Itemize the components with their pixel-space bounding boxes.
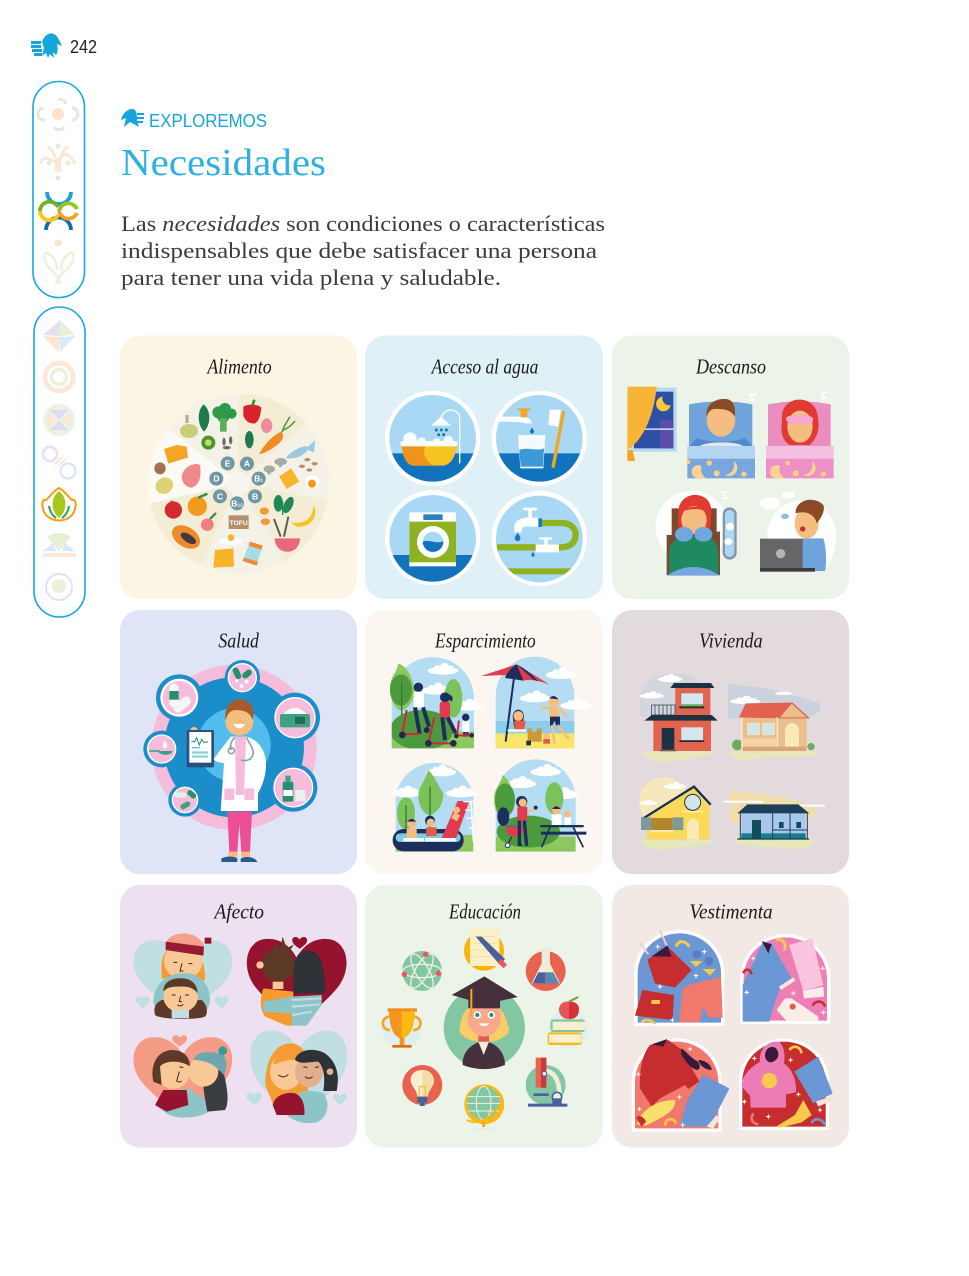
icon: capsules	[156, 674, 203, 721]
icon: flask	[526, 948, 566, 991]
icon: pills	[225, 660, 260, 695]
sticker: blue arch	[635, 930, 723, 1024]
icon: spoon	[143, 731, 180, 767]
icon: bulb	[402, 1065, 442, 1106]
sticker: pink arch	[742, 936, 829, 1022]
heading: Alimento	[206, 357, 272, 379]
panel: Vestimenta	[612, 885, 849, 1148]
heading: Afecto	[212, 901, 264, 923]
sidebar capsule: top	[33, 82, 84, 298]
icon: cream jar	[270, 693, 320, 743]
food icons	[153, 400, 319, 568]
icon: pipe and faucet	[492, 491, 587, 586]
icon: paper and pencil	[464, 928, 507, 971]
icon: interlaced arcs	[40, 192, 77, 230]
food wheel: D	[213, 474, 219, 484]
section header	[121, 109, 267, 131]
food wheel: C	[217, 491, 224, 501]
intro text: indispensables que debe satisfacer una persona	[121, 238, 597, 263]
heading: Descanso	[695, 357, 766, 379]
couple: kissing	[133, 1035, 232, 1118]
food wheel: B	[252, 491, 258, 501]
food wheel	[148, 394, 329, 574]
kicker: EXPLOREMOS	[149, 111, 267, 131]
icon: swirl	[38, 100, 78, 130]
food wheel: E	[225, 458, 231, 468]
panel: Salud	[120, 610, 357, 874]
panel: Vivienda	[612, 610, 849, 874]
page number: 242	[70, 37, 97, 57]
panel: Esparcimiento	[365, 610, 603, 874]
couple: seen from behind	[247, 937, 347, 1026]
icon: diamond	[43, 320, 75, 353]
food wheel: B1	[254, 474, 263, 484]
house: yellow with round window	[639, 777, 713, 850]
icon: ring	[45, 363, 73, 391]
icon: bottle	[269, 764, 317, 812]
icon: small capsules	[168, 783, 202, 817]
scene: pool	[391, 763, 477, 853]
heading: Vestimenta	[689, 902, 773, 924]
sticker: dark red arch	[741, 1040, 837, 1128]
icon: microscope	[526, 1058, 567, 1107]
panel: Acceso al agua	[365, 336, 603, 599]
icon: fan	[43, 533, 76, 557]
icon: books and apple	[548, 997, 587, 1048]
food icons: TOFU	[230, 520, 248, 527]
sidebar capsule: bottom	[34, 307, 85, 617]
icon: man sleeping	[686, 395, 757, 478]
page number header	[31, 33, 97, 58]
panel: Educación	[365, 885, 603, 1148]
title: Necesidades	[121, 142, 326, 184]
heading: Esparcimiento	[434, 630, 536, 652]
icon: leaves	[44, 240, 73, 284]
icon: trophy	[382, 1008, 422, 1048]
graduate portrait	[444, 976, 525, 1069]
icon: bird glyph	[31, 33, 62, 58]
heading: Vivienda	[699, 630, 763, 652]
intro text: Las necesidades son condiciones o características	[121, 211, 605, 236]
panel: Alimento	[120, 336, 357, 599]
scene: barbecue	[493, 759, 586, 853]
heading: Salud	[218, 630, 260, 652]
food wheel: A	[244, 459, 251, 469]
house: peach cottage	[728, 683, 823, 760]
icon: cross circle	[43, 404, 75, 436]
couple: two women	[247, 1031, 347, 1123]
food wheel: B12	[231, 498, 243, 508]
icon: tap and glass	[492, 391, 588, 487]
intro text	[121, 211, 605, 290]
icon: globe	[464, 1084, 504, 1130]
icon: man yawning at laptop	[760, 492, 836, 572]
vitamin badges	[209, 456, 266, 510]
icon: bird glyph small	[121, 109, 144, 127]
icon: branches	[40, 144, 75, 180]
scene: beach	[481, 657, 591, 750]
icon: woman with sleep mask	[766, 392, 834, 478]
doctor figure	[187, 699, 266, 862]
heading: Educación	[448, 902, 521, 924]
house: blue with porch	[723, 790, 825, 849]
intro text: para tener una vida plena y saludable.	[121, 265, 501, 290]
sticker: red-salmon arch	[633, 1039, 729, 1130]
icon: atom	[402, 951, 442, 991]
couple: hat and hug	[133, 934, 232, 1019]
house: red two-storey	[639, 673, 718, 763]
icon: woman on airplane	[656, 491, 737, 576]
scene: scooters	[385, 657, 484, 752]
icon: bathtub	[385, 391, 482, 487]
panel: Afecto	[120, 885, 357, 1148]
heading: Acceso al agua	[430, 357, 538, 379]
panel: Descanso	[612, 336, 849, 599]
icon: washing machine	[385, 490, 482, 588]
icon: night window	[627, 387, 677, 461]
icon: linked circles	[43, 447, 76, 478]
icon: circle sketch	[46, 574, 72, 600]
icon: lotus	[42, 488, 76, 520]
health rings	[151, 665, 317, 830]
